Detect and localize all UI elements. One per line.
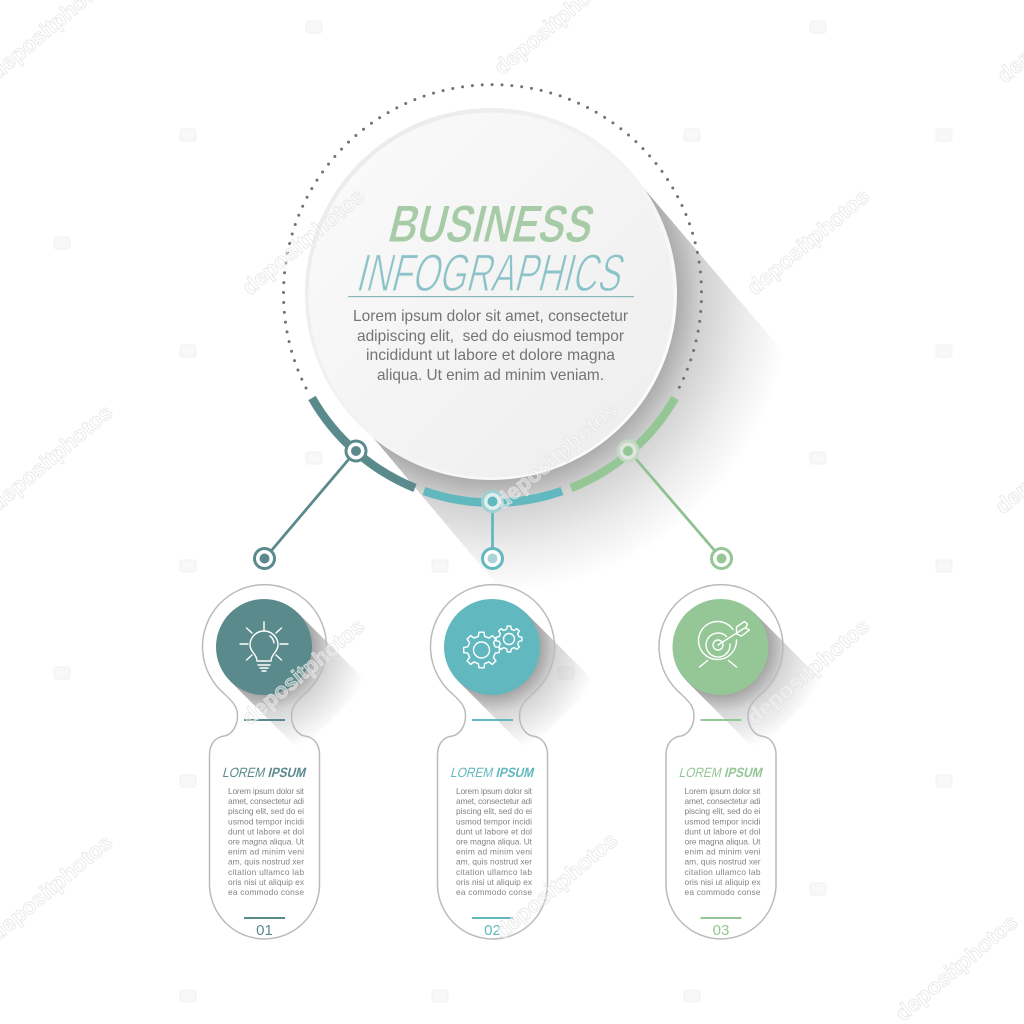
divider [244,719,285,721]
intro text: adipiscing elit, sed do eiusmod tempor [357,328,624,345]
body text: am, quis nostrud xer [684,857,761,867]
body text: citation ullamco lab [228,867,304,877]
footer bar [244,917,285,919]
icon disc [672,599,768,695]
watermark text: depositphotos [890,909,1022,1024]
body text: oris nisi ut aliquip ex [684,877,761,887]
body text: enim ad minim veni [456,847,532,857]
title: INFOGRAPHICS [352,244,631,303]
body text: Lorem ipsum dolor sit [684,786,761,796]
title [352,195,631,303]
intro text: aliqua. Ut enim ad minim veniam. [377,367,604,384]
body text: ea commodo conse [684,887,761,897]
icon shadow [230,613,368,751]
divider [700,719,742,721]
body text: dunt ut labore et dol [684,826,761,836]
title: BUSINESS [383,195,601,254]
body text: dunt ut labore et dol [228,826,304,836]
icon: gears [464,626,522,668]
body text: ore magna aliqua. Ut [228,836,305,846]
intro text [353,308,628,384]
connector 2 [482,492,502,568]
body text: usmod tempor incidi [684,816,761,826]
divider [472,719,513,721]
heading: LOREM IPSUM [678,765,764,780]
icon: target [699,621,750,667]
body text [456,786,533,897]
body text: amet, consectetur adi [456,796,532,806]
body text: dunt ut labore et dol [456,826,532,836]
icon: light bulb [240,622,288,671]
icon shadow [686,613,824,751]
body text: Lorem ipsum dolor sit [456,786,533,796]
number: 03 [713,922,729,939]
icon disc [444,599,540,695]
intro text: Lorem ipsum dolor sit amet, consectetur [353,308,628,325]
panel 3 [659,585,824,939]
watermark text: depositphotos [742,613,874,730]
number: 01 [256,922,273,939]
body text: piscing elit, sed do ei [456,806,532,816]
footer bar [472,917,513,919]
body text: ore magna aliqua. Ut [456,836,533,846]
body text [228,786,305,897]
panel outline [659,585,783,939]
icon disc [216,599,312,695]
intro text: incididunt ut labore et dolore magna [366,347,615,364]
body text: amet, consectetur adi [228,796,304,806]
body text: Lorem ipsum dolor sit [228,786,305,796]
footer bar [700,917,742,919]
title underline [348,296,634,297]
panel outline [430,585,554,939]
body text: ore magna aliqua. Ut [684,836,761,846]
body text: citation ullamco lab [684,867,761,877]
body text: oris nisi ut aliquip ex [228,877,305,887]
connector 3 [618,441,732,568]
panel 2 [430,585,596,939]
main circle [305,108,677,480]
body text: citation ullamco lab [456,867,532,877]
watermark text: depositphotos [237,183,369,300]
watermark text: depositphotos [490,397,622,514]
connector 1 [254,441,366,568]
body text: enim ad minim veni [684,847,761,857]
body text: ea commodo conse [228,887,304,897]
body text: am, quis nostrud xer [456,857,532,867]
body text: ea commodo conse [456,887,532,897]
main circle long shadow [360,172,820,660]
body text: am, quis nostrud xer [228,857,304,867]
arc segment 1 [312,398,415,488]
body text: usmod tempor incidi [228,816,304,826]
arc segment 2 [424,491,562,503]
body text: piscing elit, sed do ei [228,806,304,816]
body text: usmod tempor incidi [456,816,532,826]
icon shadow [458,613,596,751]
number: 02 [484,922,501,939]
watermark text: depositphotos [237,613,369,730]
dotted ring [284,85,702,388]
body text: amet, consectetur adi [684,796,761,806]
watermark text: depositphotos [742,183,874,300]
body text: enim ad minim veni [228,847,304,857]
heading: LOREM IPSUM [449,765,536,780]
heading: LOREM IPSUM [221,765,308,780]
arc segment 3 [571,398,675,488]
body text: oris nisi ut aliquip ex [456,877,533,887]
watermark text: depositphotos [490,827,622,944]
panel 1 [202,585,368,939]
body text: piscing elit, sed do ei [684,806,761,816]
panel outline [202,585,326,939]
body text [684,786,761,897]
